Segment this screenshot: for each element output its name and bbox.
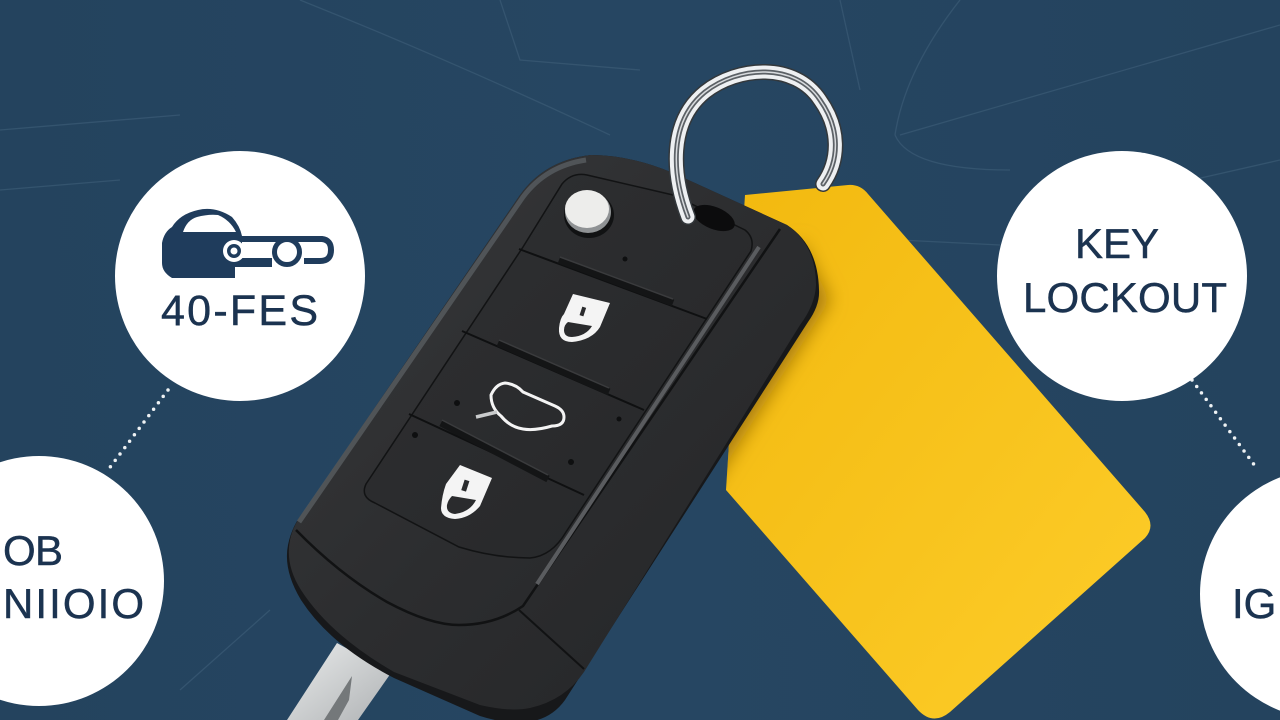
icon: car	[476, 383, 564, 430]
button dividers	[409, 249, 707, 495]
outer seam	[296, 229, 780, 625]
key blade	[287, 643, 391, 720]
circle: 40-FES: 40-FES	[161, 287, 318, 335]
icon: lock bottom	[441, 465, 492, 519]
icon: lock top	[559, 294, 610, 342]
metal key ring	[676, 72, 835, 217]
dotted connector right	[1192, 380, 1258, 470]
lower seam	[519, 610, 584, 669]
circle: key lockout: KEY	[1075, 220, 1159, 267]
circle: IG: IG	[1232, 580, 1276, 627]
button panel	[364, 174, 752, 558]
key hole	[689, 200, 739, 236]
fob underside	[287, 155, 819, 720]
key fob	[287, 155, 819, 720]
icon: key	[162, 209, 331, 278]
fob shell	[289, 155, 816, 709]
dotted connector left	[108, 390, 168, 470]
silver button	[564, 190, 614, 238]
left rim highlight	[299, 160, 586, 522]
circle: OB: OB	[3, 527, 63, 574]
small dots	[412, 256, 628, 465]
circle: OB	[0, 456, 164, 706]
circle: 40-FES	[115, 151, 365, 401]
seam highlight	[537, 247, 759, 584]
circle: OB: NIIOIO	[3, 580, 144, 627]
circle: key lockout	[997, 151, 1247, 401]
yellow tag	[726, 184, 1150, 718]
divider bars	[441, 260, 673, 479]
circle: key lockout: LOCKOUT	[1023, 274, 1227, 321]
circle: IG	[1200, 469, 1280, 719]
